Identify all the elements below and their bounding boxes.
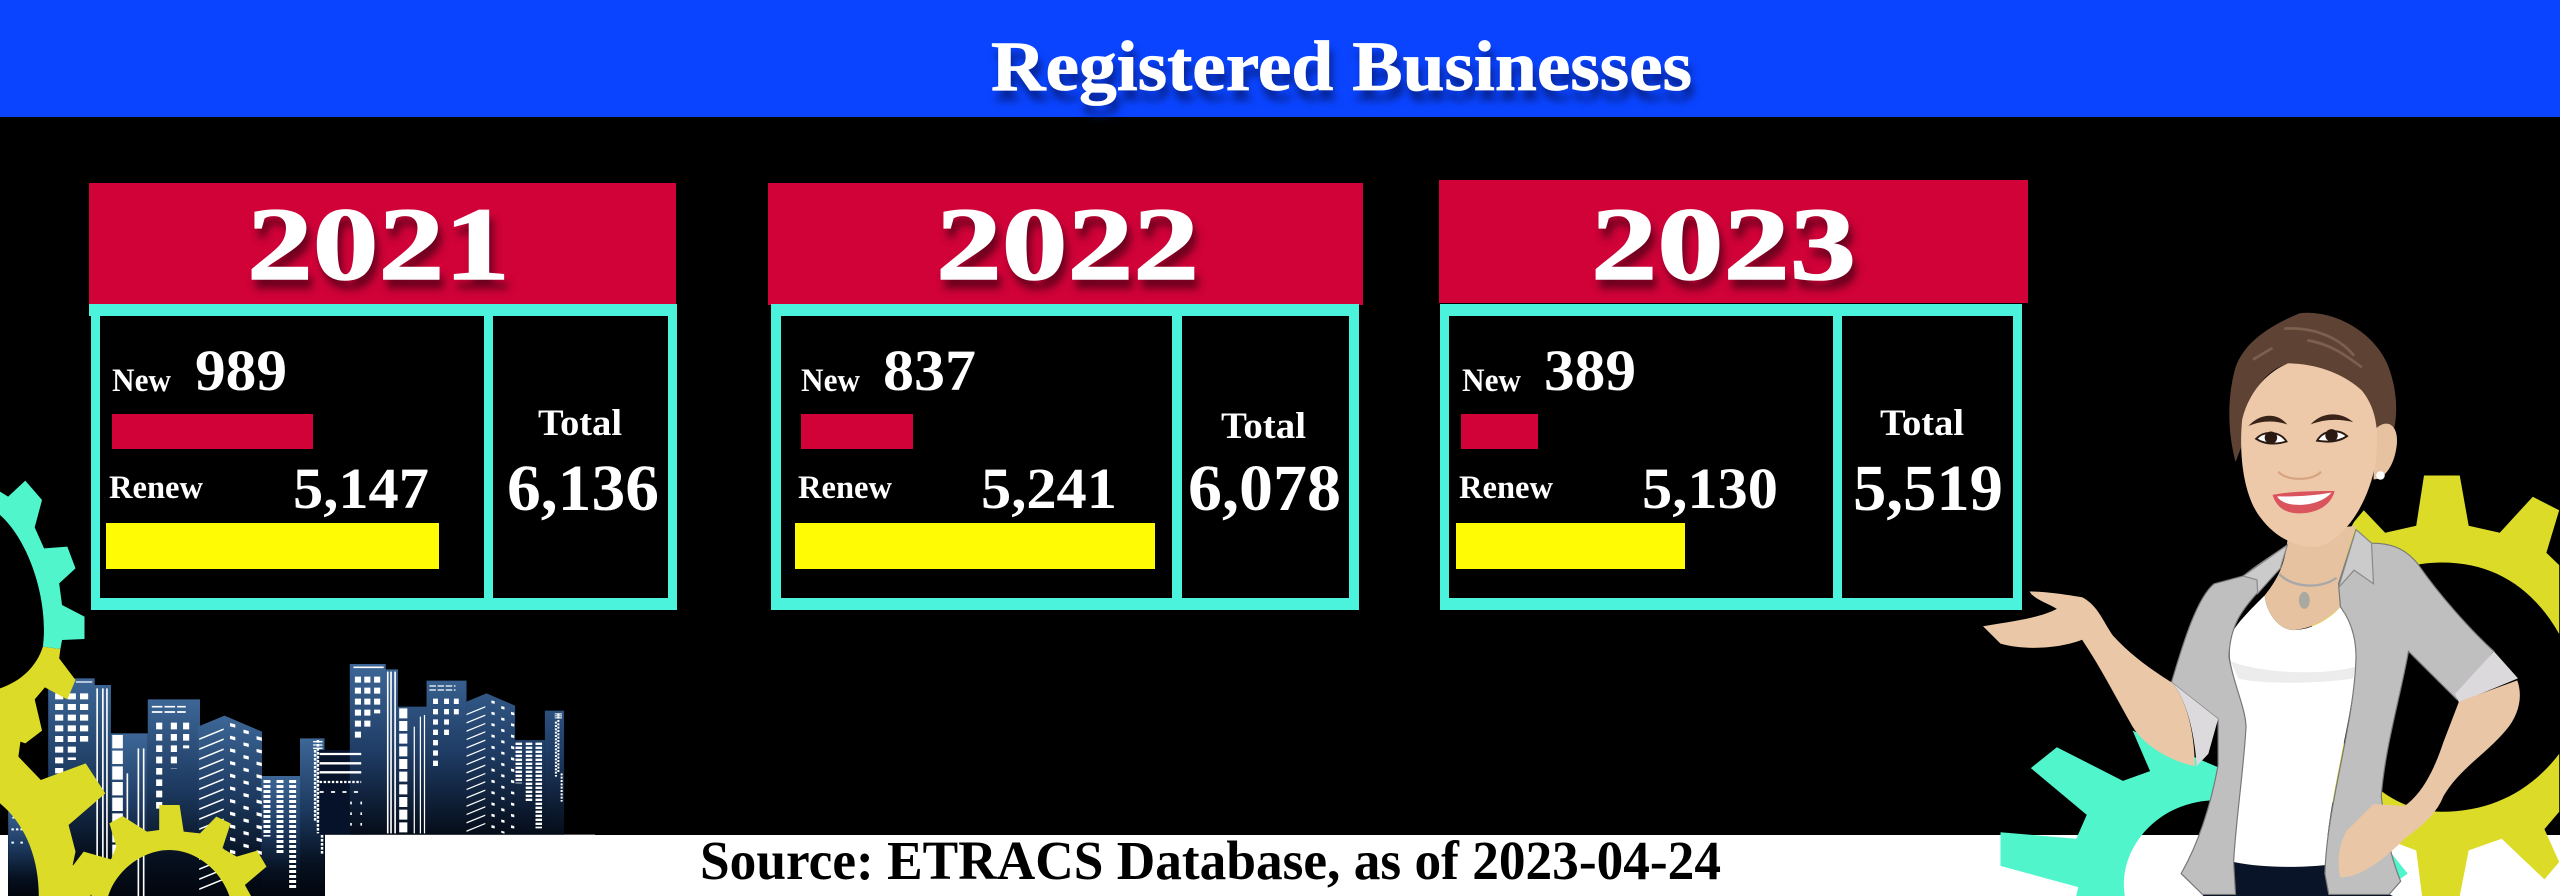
character: presenter woman xyxy=(1983,313,2520,896)
total value: 6,136 xyxy=(507,452,659,525)
ear and earring xyxy=(2373,424,2397,480)
year header 2023 xyxy=(1439,180,2028,303)
renew value: 5,241 xyxy=(981,456,1117,521)
hair xyxy=(2229,313,2396,464)
left cuff xyxy=(2171,682,2218,766)
eyes xyxy=(2256,429,2347,444)
new label: New xyxy=(1462,363,1521,399)
gear: right yellow xyxy=(2311,476,2559,896)
table frame 2022 xyxy=(771,304,1359,610)
white top xyxy=(2230,595,2356,867)
renew label: Renew xyxy=(109,470,203,506)
total label: Total xyxy=(1880,403,1964,444)
renew value: 5,130 xyxy=(1642,456,1778,521)
renew bar xyxy=(1456,523,1685,569)
gear: left yellow mass xyxy=(0,647,105,896)
gear: right teal xyxy=(2001,731,2218,896)
total value: 6,078 xyxy=(1188,452,1341,525)
year label 2021: 2021 xyxy=(247,187,510,302)
total label: Total xyxy=(1221,406,1306,447)
panel: 2022 xyxy=(768,183,1363,610)
table frame 2023 xyxy=(1440,304,2022,610)
neck xyxy=(2265,526,2356,630)
total value: 5,519 xyxy=(1853,452,2003,525)
footer white band xyxy=(0,834,2560,896)
new bar xyxy=(801,414,913,449)
trousers xyxy=(2203,858,2393,896)
gear: bottom small yellow xyxy=(73,805,267,896)
collar xyxy=(2243,530,2373,593)
new bar xyxy=(1461,414,1538,449)
new value: 989 xyxy=(195,338,287,403)
renew label: Renew xyxy=(798,470,892,506)
source note: Source: ETRACS Database, as of 2023-04-24 xyxy=(700,830,1721,891)
eyebrows xyxy=(2248,414,2353,426)
renew value: 5,147 xyxy=(293,456,429,521)
table frame 2021 xyxy=(89,304,677,610)
year label 2022: 2022 xyxy=(936,187,1199,302)
renew label: Renew xyxy=(1459,470,1553,506)
nose xyxy=(2278,472,2321,479)
right arm and hand xyxy=(2339,680,2520,877)
new value: 389 xyxy=(1544,338,1636,403)
new label: New xyxy=(801,363,860,399)
year header 2022 xyxy=(768,183,1363,305)
title: Registered Businesses xyxy=(991,28,1692,106)
header band xyxy=(0,0,2560,117)
year header 2021 xyxy=(89,183,676,305)
new value: 837 xyxy=(883,338,976,403)
right cuff xyxy=(2455,651,2518,703)
gear: right teal fragment xyxy=(2389,850,2408,881)
new bar xyxy=(112,414,313,449)
new label: New xyxy=(112,363,171,399)
left cardigan panel xyxy=(2171,545,2287,894)
total label: Total xyxy=(538,403,622,444)
gears: right cluster xyxy=(2001,476,2559,896)
right cardigan panel xyxy=(2325,530,2494,894)
left arm and open hand xyxy=(1983,591,2195,766)
necklace xyxy=(2279,574,2337,609)
panel: 2023 xyxy=(1439,180,2028,610)
renew bar xyxy=(795,523,1155,569)
renew bar xyxy=(106,523,439,569)
face xyxy=(2241,363,2377,547)
gear: left teal xyxy=(0,481,84,649)
panel: 2021 xyxy=(89,183,677,610)
year label 2023: 2023 xyxy=(1591,187,1856,302)
city skyline illustration xyxy=(8,664,564,896)
mouth xyxy=(2272,491,2335,513)
gears: left cluster xyxy=(0,481,267,896)
